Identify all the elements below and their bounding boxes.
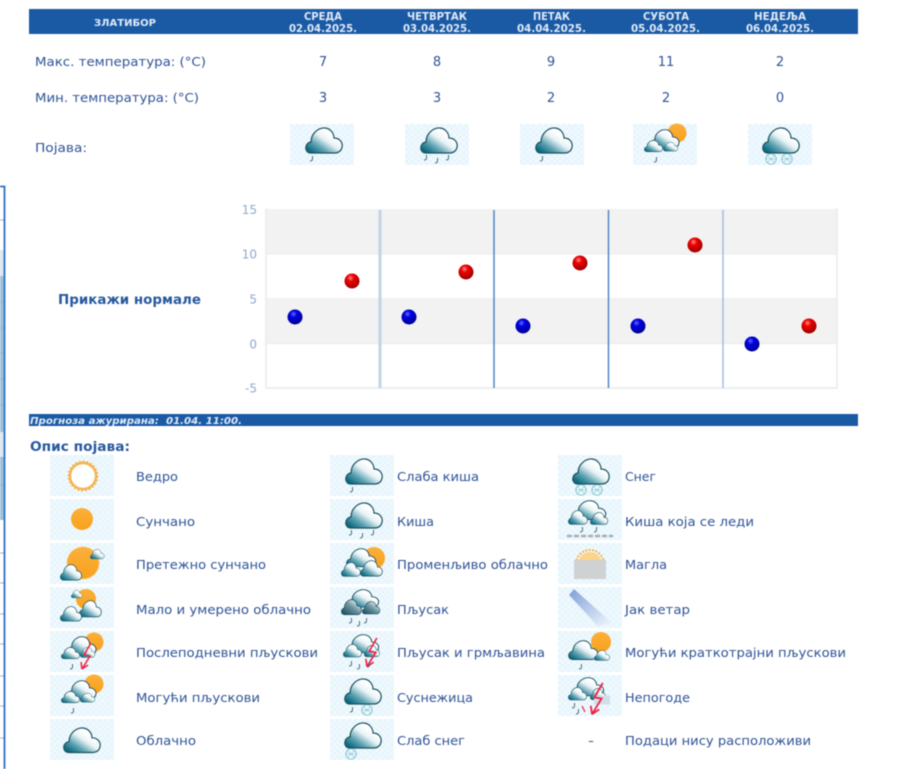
row: max temperature (35, 54, 784, 70)
day 2 header (403, 11, 471, 35)
legend heading: Опис појава: (30, 440, 130, 455)
icon: snow day 5 (748, 124, 812, 165)
icon: no data dash: - (588, 733, 594, 748)
row: min temperature: Мин. температура: (°C) (35, 90, 199, 105)
label: freezing rain: Киша која се леди (625, 514, 754, 529)
row: max temperature: 9 (547, 55, 555, 70)
row: min temperature: 2 (547, 91, 555, 106)
row: min temperature: 2 (662, 91, 670, 106)
icon: sunny (50, 499, 114, 540)
temperature chart (242, 203, 837, 396)
label: partly cloudy: Мало и умерено облачно (136, 602, 311, 617)
label: brief showers: Могући краткотрајни пљускови (625, 645, 846, 660)
row: min temperature: 3 (433, 91, 441, 106)
icon: light snow (330, 719, 394, 760)
icon: sleet (330, 675, 394, 716)
y axis labels: 0 (249, 338, 257, 352)
label: strong wind: Јак ветар (624, 602, 690, 617)
y axis labels: -5 (245, 382, 257, 396)
label: sunny: Сунчано (136, 514, 195, 529)
day 2 header: ЧЕТВРТАК (407, 11, 467, 23)
day 3 header (517, 11, 586, 35)
label: fog: Магла (625, 557, 667, 572)
label: variable cloudy: Променљиво облачно (397, 557, 548, 572)
legend column 3 (558, 455, 846, 748)
label: severe weather: Непогоде (625, 690, 690, 705)
icon: rain day 2 (405, 124, 469, 165)
max temperature points (344, 238, 816, 334)
day 1 header: СРЕДА (304, 11, 343, 23)
header bar (29, 9, 858, 35)
row: max temperature: 8 (433, 55, 441, 70)
label: light rain: Слаба киша (397, 469, 479, 484)
day 3 header: 04.04.2025. (517, 23, 586, 35)
day 2 header: 03.04.2025. (403, 23, 471, 35)
legend column 1 (50, 455, 318, 760)
icon: rain (330, 499, 394, 540)
day 4 header (631, 11, 700, 35)
row: min temperature: 0 (776, 91, 784, 106)
icon: fog (558, 543, 622, 584)
icon: possible showers (50, 674, 114, 716)
station name: ЗЛАТИБОР (94, 18, 156, 29)
icon: cloudy (50, 719, 114, 760)
icon: mostly sunny (50, 543, 114, 584)
y axis labels: 15 (242, 203, 257, 217)
icon: afternoon showers (50, 631, 114, 672)
day 4 header: 05.04.2025. (631, 23, 700, 35)
day 1 header (289, 11, 357, 35)
day 5 header: НЕДЕЉА (754, 11, 807, 23)
label: shower and thunder: Пљусак и грмљавина (397, 645, 545, 660)
label: snow: Снег (625, 469, 656, 484)
legend column 2 (330, 455, 548, 760)
icon: shower (330, 587, 394, 628)
icon: strong wind (558, 587, 622, 628)
icon: severe weather (558, 675, 622, 716)
row: max temperature: Макс. температура: (°C) (35, 54, 206, 69)
toggle: show normals: Прикажи нормале (58, 293, 201, 308)
row: max temperature: 2 (776, 55, 784, 70)
label: mostly sunny: Претежно сунчано (136, 557, 266, 572)
label: possible showers: Могући пљускови (136, 690, 260, 705)
day 1 header: 02.04.2025. (289, 23, 357, 35)
row: phenomena (35, 124, 812, 165)
icon: partly cloudy (50, 587, 114, 628)
label: clear: Ведро (136, 469, 178, 484)
label: rain: Киша (397, 514, 434, 529)
icon: brief showers (558, 631, 622, 672)
forecast updated bar (29, 414, 858, 427)
label: sleet: Суснежица (397, 690, 473, 705)
min temperature points (288, 310, 760, 352)
icon: clear (50, 455, 114, 496)
row: min temperature (35, 90, 784, 106)
icon: light rain (330, 455, 394, 496)
icon: shower and thunder (330, 631, 394, 672)
label: light snow: Слаб снег (397, 733, 465, 748)
icon: freezing rain (558, 499, 622, 540)
day 5 header: 06.04.2025. (746, 23, 814, 35)
row: max temperature: 11 (658, 55, 674, 70)
icon: variable cloudy (330, 543, 394, 584)
y axis labels (242, 203, 257, 396)
y axis labels: 5 (249, 292, 257, 306)
label: cloudy: Облачно (136, 733, 196, 748)
icon: snow (558, 455, 622, 496)
left edge: clipped neighbouring table (0, 186, 4, 769)
day 4 header: СУБОТА (643, 11, 690, 23)
row: phenomena: Појава: (35, 140, 87, 155)
label: afternoon showers: Послеподневни пљускови (136, 645, 318, 660)
label: shower: Пљусак (397, 602, 449, 617)
day 5 header (746, 11, 814, 35)
label: no data: Подаци нису расположиви (625, 733, 811, 748)
row: min temperature: 3 (319, 91, 327, 106)
y axis labels: 10 (242, 248, 257, 262)
forecast updated bar: Прогноза ажурирана: 01.04. 11:00. (30, 416, 242, 427)
icon: possible showers day 4 (633, 124, 697, 165)
icon: light rain day 3 (520, 124, 584, 165)
row: max temperature: 7 (319, 55, 327, 70)
icon: light rain day 1 (290, 124, 354, 165)
day 3 header: ПЕТАК (533, 11, 570, 23)
